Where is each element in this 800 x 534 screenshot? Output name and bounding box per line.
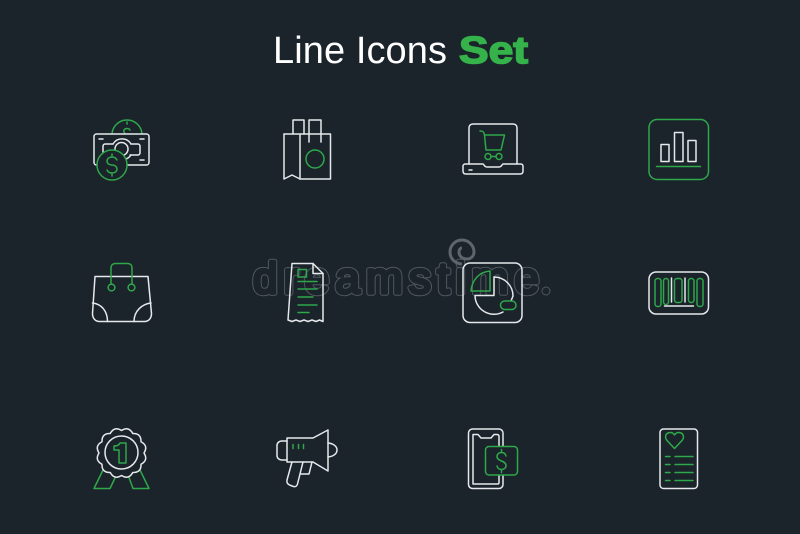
watermark: dreamstime: [253, 254, 539, 303]
icon: award badge: [94, 429, 149, 488]
icon: laptop with shopping cart: [463, 124, 523, 174]
title: Set: [459, 30, 528, 72]
icon: barcode: [649, 272, 708, 314]
watermark: dreamstime: [253, 254, 539, 303]
title: [273, 30, 528, 72]
icon: bar chart: [649, 120, 708, 180]
title: Line Icons: [273, 30, 447, 72]
icon: handbag: [92, 264, 152, 322]
icon: megaphone: [277, 430, 337, 487]
icon: phone with dollar: [468, 429, 518, 488]
icon: money and coins: [94, 120, 149, 180]
icon: heart list: [660, 429, 698, 488]
icon: document receipt: [288, 264, 323, 322]
icon: pie chart: [463, 263, 522, 322]
icon: shopping bags: [284, 120, 330, 179]
